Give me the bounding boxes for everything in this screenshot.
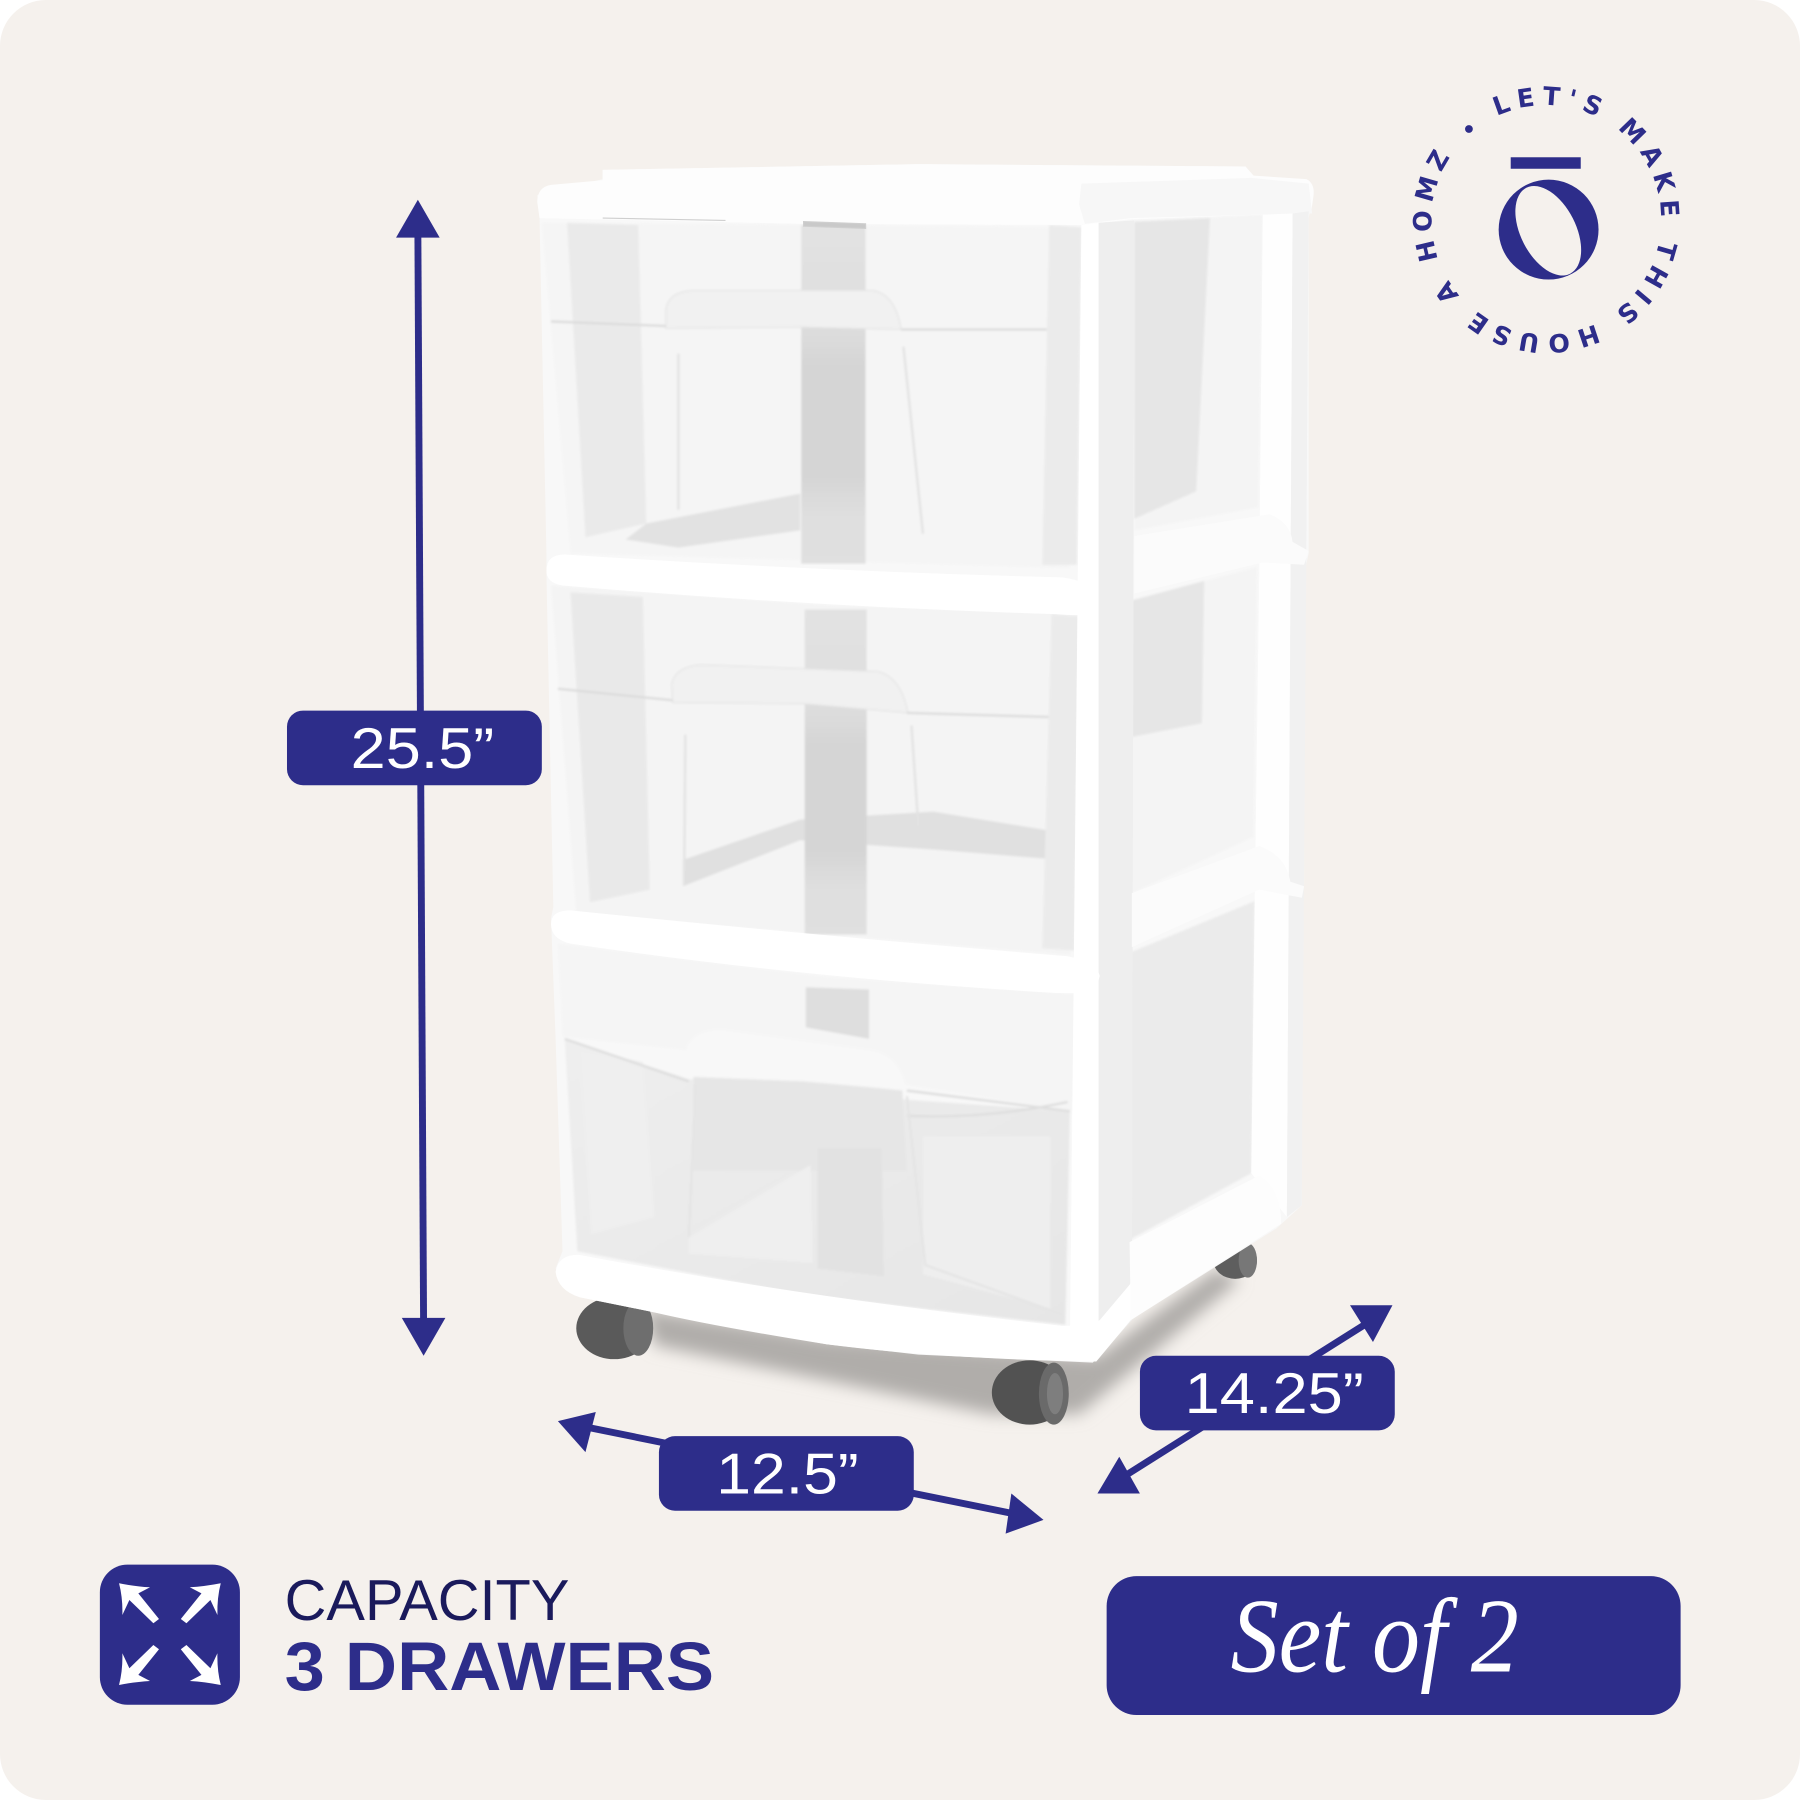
drawer 2 right edge: [1042, 614, 1079, 951]
cart lid: [537, 164, 1314, 228]
width label: [659, 1436, 914, 1511]
arrow: up left: [119, 1583, 159, 1623]
set of 2 badge: [1107, 1576, 1681, 1715]
brand badge: [1412, 86, 1680, 353]
height dimension arrow: [396, 200, 445, 1356]
drawer 3 lower front: [565, 1039, 1070, 1325]
circular slogan: LET'S MAKE THIS HOUSE A HOMZ: [1412, 86, 1680, 353]
drawer 2 side panel: [1132, 567, 1257, 893]
drawer 1 side panel: [1134, 215, 1263, 530]
capacity text: CAPACITY: [285, 1569, 569, 1633]
lower shelf rail: side: [1132, 846, 1304, 947]
drawer 1 right edge: [1042, 225, 1081, 565]
capacity text: 3 DRAWERS: [285, 1628, 714, 1705]
drawer 2: middle: [551, 567, 1257, 955]
wheel: front right: [992, 1360, 1069, 1425]
drawer 3: bottom: [558, 901, 1255, 1325]
wheel: front left: [576, 1297, 653, 1359]
height label: 25.5”: [351, 717, 494, 781]
height label: [287, 711, 542, 785]
cart body silhouette: [537, 164, 1313, 1363]
arrow: down left: [119, 1645, 159, 1685]
drawer 1 floor shade: [626, 494, 800, 548]
drawer 3 centre column: [806, 987, 869, 1039]
drawer 3 handle: [565, 1030, 1070, 1314]
width dimension arrow: [558, 1412, 1043, 1534]
drawer 3 upper front: [558, 944, 1079, 1111]
drawer 2 floor shade: [683, 812, 1046, 886]
base rail: side: [1130, 1176, 1281, 1320]
drawer 2 left column: [571, 592, 650, 902]
drawer 2 front: [551, 585, 1079, 955]
wheel: rear: [1213, 1242, 1257, 1279]
drawer 1 handle: [551, 290, 1047, 534]
drawer 1: top: [542, 215, 1263, 568]
front corner post: [1070, 220, 1134, 1357]
product: three drawer storage cart: [537, 164, 1314, 1425]
capacity icon: [100, 1565, 240, 1705]
set of 2 badge: Set of 2: [1231, 1577, 1519, 1694]
logo macron bar: [1511, 157, 1581, 169]
base rail: front: [556, 1255, 1131, 1361]
arrow: up right: [181, 1583, 221, 1623]
lower shelf rail: front: [551, 910, 1100, 993]
depth dimension arrow: [1097, 1305, 1392, 1493]
arrow: down right: [181, 1645, 221, 1685]
depth label: 14.25”: [1185, 1362, 1364, 1426]
drawer 3 side panel: [1130, 901, 1255, 1240]
drawer 1 centre column: [801, 225, 866, 564]
drawer 2 handle: [558, 665, 1065, 884]
floor shadow: [643, 1268, 1240, 1414]
drawer 1 front: [542, 223, 1081, 568]
capacity text: [285, 1569, 714, 1705]
upper shelf rail: side: [1134, 514, 1309, 593]
logo letter o: [1499, 175, 1599, 286]
drawer 3 floor highlight: [689, 1165, 813, 1263]
drawer 1 left column: [567, 223, 646, 537]
drawer 3 left column: [580, 1050, 654, 1234]
rear corner post: [1251, 211, 1309, 1217]
width label: 12.5”: [716, 1442, 859, 1506]
badge dot: [1465, 125, 1473, 133]
upper shelf rail: front: [546, 554, 1097, 615]
depth label: [1140, 1356, 1395, 1430]
drawer 2 centre column: [805, 610, 867, 934]
